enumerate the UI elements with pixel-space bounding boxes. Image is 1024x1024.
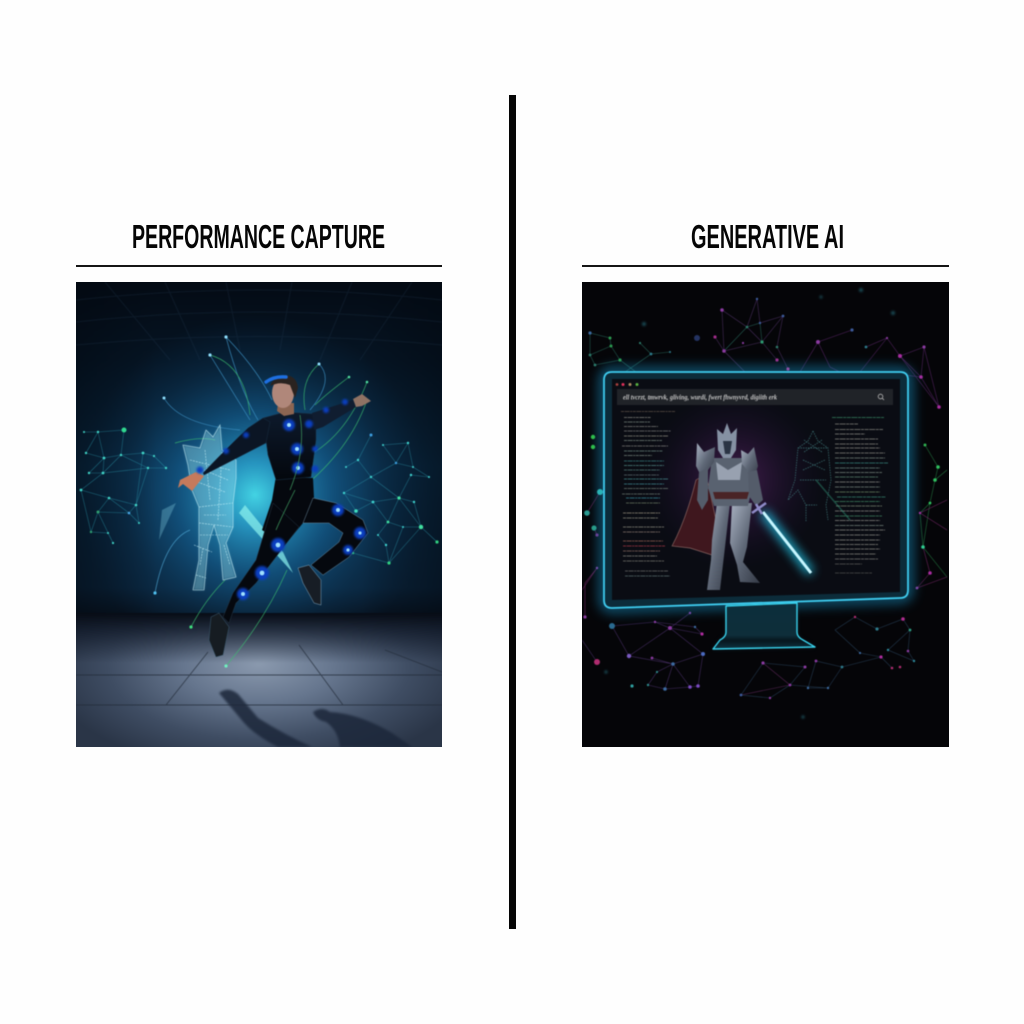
sword hilt bbox=[752, 503, 766, 514]
head markers bbox=[266, 377, 286, 382]
panel: performance capture image bbox=[70, 276, 448, 753]
ghost wireframe knight bbox=[788, 431, 850, 522]
tracking curve end points bbox=[153, 335, 368, 668]
torso bbox=[263, 412, 316, 480]
hair bbox=[270, 375, 298, 398]
heading underline: right bbox=[582, 265, 949, 267]
code text: right column bbox=[832, 418, 888, 573]
belt bbox=[713, 492, 749, 499]
knight bbox=[696, 423, 763, 590]
monitor screen bbox=[612, 379, 900, 600]
ghost cape and sword bbox=[159, 503, 176, 540]
heading: generative AI: GENERATIVE AI bbox=[691, 218, 844, 255]
monitor stand bbox=[713, 603, 815, 649]
rear leg bbox=[303, 498, 368, 575]
wireframe network: left cluster bbox=[80, 428, 167, 544]
center divider bbox=[509, 95, 516, 929]
left leg bbox=[707, 503, 730, 590]
knight cape bbox=[672, 474, 716, 555]
studio floor bbox=[70, 613, 448, 753]
network: nodes bbox=[583, 288, 941, 719]
monitor outer glow bbox=[604, 372, 908, 608]
right shoulder bbox=[741, 447, 758, 478]
left arm bbox=[697, 468, 708, 510]
window control dots bbox=[616, 383, 638, 386]
right arm bbox=[312, 400, 356, 430]
hips bbox=[261, 477, 315, 537]
floor shadow bbox=[219, 690, 412, 747]
right hand bbox=[353, 394, 371, 407]
wireframe network: right cluster bbox=[343, 434, 439, 565]
code text: left column bbox=[621, 412, 675, 576]
search icon bbox=[878, 394, 884, 400]
torso bbox=[708, 458, 752, 506]
neck bbox=[277, 403, 294, 416]
right arm bbox=[748, 470, 763, 506]
left shoulder bbox=[696, 443, 715, 478]
search bar: ell tvcrzt, tmwrvk, gliving, wurdi, fwert fhwnyvrd, digiith erk bbox=[623, 394, 777, 402]
suit centre seam bbox=[276, 415, 302, 530]
face shadow bbox=[723, 441, 732, 454]
head bbox=[272, 378, 294, 408]
armor highlights bbox=[716, 462, 742, 480]
left hand bbox=[178, 472, 204, 491]
tracking curves bbox=[155, 337, 367, 666]
right leg bbox=[730, 503, 760, 583]
heading: performance capture: PERFORMANCE CAPTURE bbox=[132, 218, 385, 255]
network: lines behind monitor bbox=[582, 299, 947, 698]
performer in mocap suit bbox=[178, 375, 371, 657]
sword glow bbox=[763, 512, 811, 573]
ghost wireframe knight bbox=[159, 425, 293, 590]
front leg bbox=[223, 503, 299, 623]
front shoe bbox=[209, 613, 229, 657]
studio wall bbox=[70, 276, 448, 622]
search bar bbox=[617, 389, 893, 405]
sword blade bbox=[763, 512, 811, 573]
dark background bbox=[576, 276, 955, 753]
panel: generative AI image bbox=[576, 276, 955, 753]
rear shoe bbox=[298, 565, 321, 605]
monitor bezel bbox=[604, 372, 908, 608]
helmet bbox=[717, 423, 737, 458]
body markers bbox=[196, 399, 366, 600]
ghost body bbox=[183, 425, 236, 590]
heading underline: left bbox=[76, 265, 442, 267]
left arm bbox=[203, 418, 270, 475]
